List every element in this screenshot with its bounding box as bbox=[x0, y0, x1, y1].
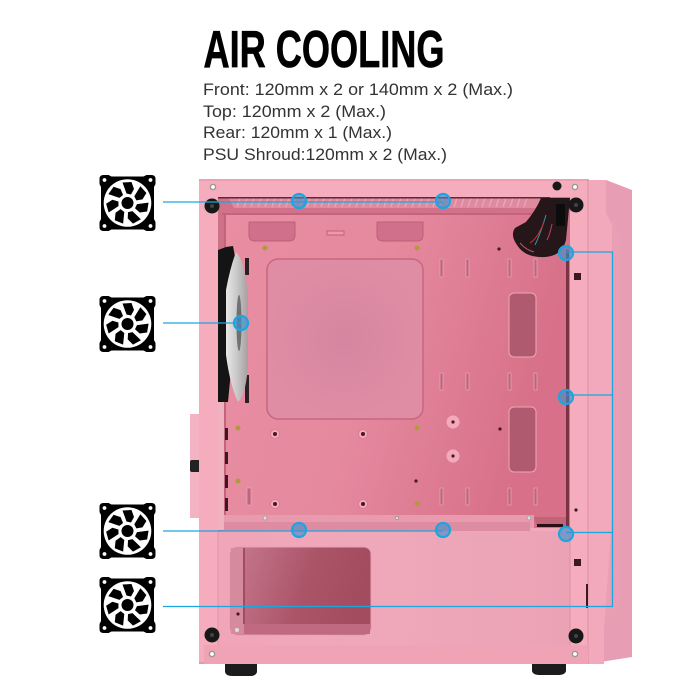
case frame bbox=[199, 179, 589, 664]
rubber grommets and screws bbox=[204, 182, 584, 657]
rear fan bbox=[218, 246, 249, 403]
tray right cutouts bbox=[509, 293, 536, 472]
left rear wall bbox=[218, 400, 224, 530]
case feet bbox=[225, 663, 566, 676]
icon: top fan bbox=[100, 175, 156, 231]
PSU shroud bbox=[218, 515, 570, 645]
tray vertical slots bbox=[247, 259, 537, 505]
motherboard standoffs bbox=[236, 246, 502, 508]
front panel bbox=[586, 180, 632, 664]
PC case bbox=[190, 179, 632, 676]
fan position markers bbox=[234, 194, 573, 541]
bottom bar bbox=[204, 645, 588, 664]
title: AIR COOLING bbox=[204, 21, 444, 79]
PSU window bbox=[230, 547, 371, 635]
rear PCI bracket bbox=[190, 414, 200, 518]
icon: PSU shroud fan bbox=[100, 503, 156, 559]
text block: fan specifications: PSU Shroud:120mm x 2 (Max.) bbox=[203, 145, 447, 164]
case drive vent marks bbox=[574, 273, 588, 608]
text block: fan specifications: Rear: 120mm x 1 (Max.) bbox=[203, 123, 392, 142]
tray top cable slots bbox=[249, 222, 423, 241]
text block: fan specifications: Top: 120mm x 2 (Max.) bbox=[203, 102, 386, 121]
icon: front fan bbox=[100, 577, 156, 633]
text block: fan specifications: Front: 120mm x 2 or 140mm x 2 (Max.) bbox=[203, 80, 513, 99]
icon: rear fan bbox=[100, 296, 156, 352]
interior opening and motherboard tray bbox=[218, 197, 570, 532]
top wall with vent bbox=[218, 197, 550, 214]
shroud and tray screws bbox=[263, 516, 531, 520]
rear expansion slots bbox=[225, 428, 228, 511]
cable bundle bbox=[513, 198, 570, 257]
text block: fan specifications bbox=[203, 80, 513, 164]
right tray edge bbox=[566, 250, 569, 530]
callout lines bbox=[163, 202, 612, 606]
tray square cutout bbox=[267, 259, 423, 419]
